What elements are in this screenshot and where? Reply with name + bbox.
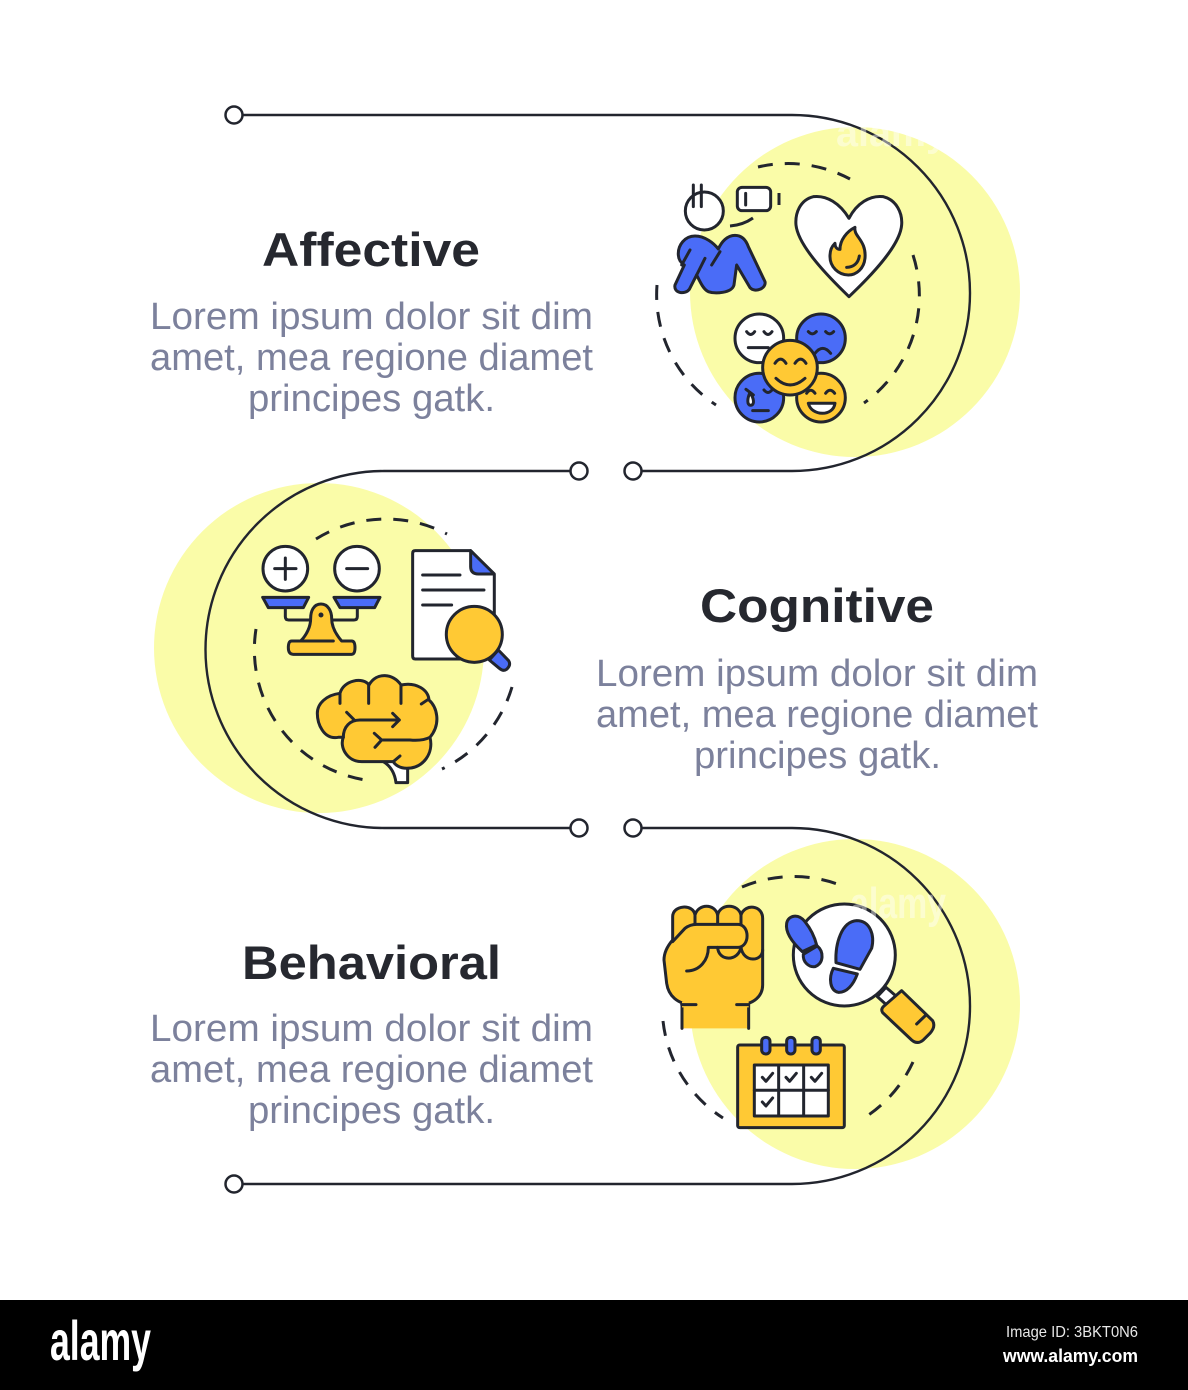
- panel: cognitive: [154, 462, 1038, 836]
- icon: footprints under magnifying glass: [786, 904, 934, 1042]
- yellow circle: affective: [690, 127, 1020, 457]
- footer logo: alamy: [50, 1309, 151, 1372]
- text: cognitive description: amet, mea regione diamet: [596, 694, 1038, 736]
- text: behavioral description: [150, 1008, 593, 1132]
- heading: behavioral: Behavioral: [242, 936, 501, 989]
- connector line: behavioral: [234, 828, 970, 1184]
- site url: www.alamy.com: [1002, 1346, 1138, 1366]
- text: affective description: amet, mea regione diamet: [150, 337, 593, 379]
- text: cognitive description: Lorem ipsum dolor sit dim: [596, 653, 1038, 695]
- icon: document under magnifying glass: [413, 551, 510, 670]
- panel: behavioral: [150, 820, 1020, 1192]
- start dot: behavioral: [624, 820, 642, 836]
- start dot: affective: [226, 106, 242, 124]
- dashed ring: behavioral: [663, 877, 913, 1118]
- icon: mood emojis: [735, 314, 845, 422]
- heading: cognitive: Cognitive: [700, 579, 934, 632]
- panel: affective: [150, 106, 1020, 480]
- watermark: bottom right: alamy: [850, 879, 946, 928]
- yellow circle: behavioral: [690, 839, 1020, 1169]
- end dot: cognitive: [570, 820, 588, 836]
- text: behavioral description: Lorem ipsum dolor sit dim: [150, 1008, 593, 1050]
- dashed ring: affective: [657, 164, 919, 405]
- icon: calendar with checkmarks: [738, 1037, 844, 1128]
- text: affective description: principes gatk.: [248, 378, 495, 420]
- footer bar: [0, 1300, 1188, 1390]
- start dot: cognitive: [570, 462, 588, 480]
- heading: affective: Affective: [262, 223, 480, 276]
- watermark: top right: alamy: [836, 113, 948, 155]
- text: affective description: [150, 296, 593, 420]
- icon: brain: [317, 676, 437, 783]
- text: affective description: Lorem ipsum dolor sit dim: [150, 296, 593, 338]
- connector line: affective: [234, 115, 970, 471]
- connector line: cognitive: [206, 471, 579, 828]
- end dot: behavioral: [226, 1176, 242, 1192]
- text: cognitive description: principes gatk.: [694, 735, 941, 777]
- icon: raised fist: [664, 906, 763, 1028]
- dashed ring: cognitive: [254, 519, 512, 781]
- text: behavioral description: amet, mea regione diamet: [150, 1049, 593, 1091]
- end dot: affective: [624, 462, 642, 480]
- text: behavioral description: principes gatk.: [248, 1090, 495, 1132]
- icon: heart with flame: [796, 196, 902, 297]
- icon: balance scale with plus and minus: [263, 546, 380, 654]
- image id: Image ID: 3BKT0N6: [1006, 1324, 1138, 1341]
- icon: exhausted person with low battery: [675, 185, 771, 293]
- text: cognitive description: [596, 653, 1038, 777]
- yellow circle: cognitive: [154, 483, 484, 813]
